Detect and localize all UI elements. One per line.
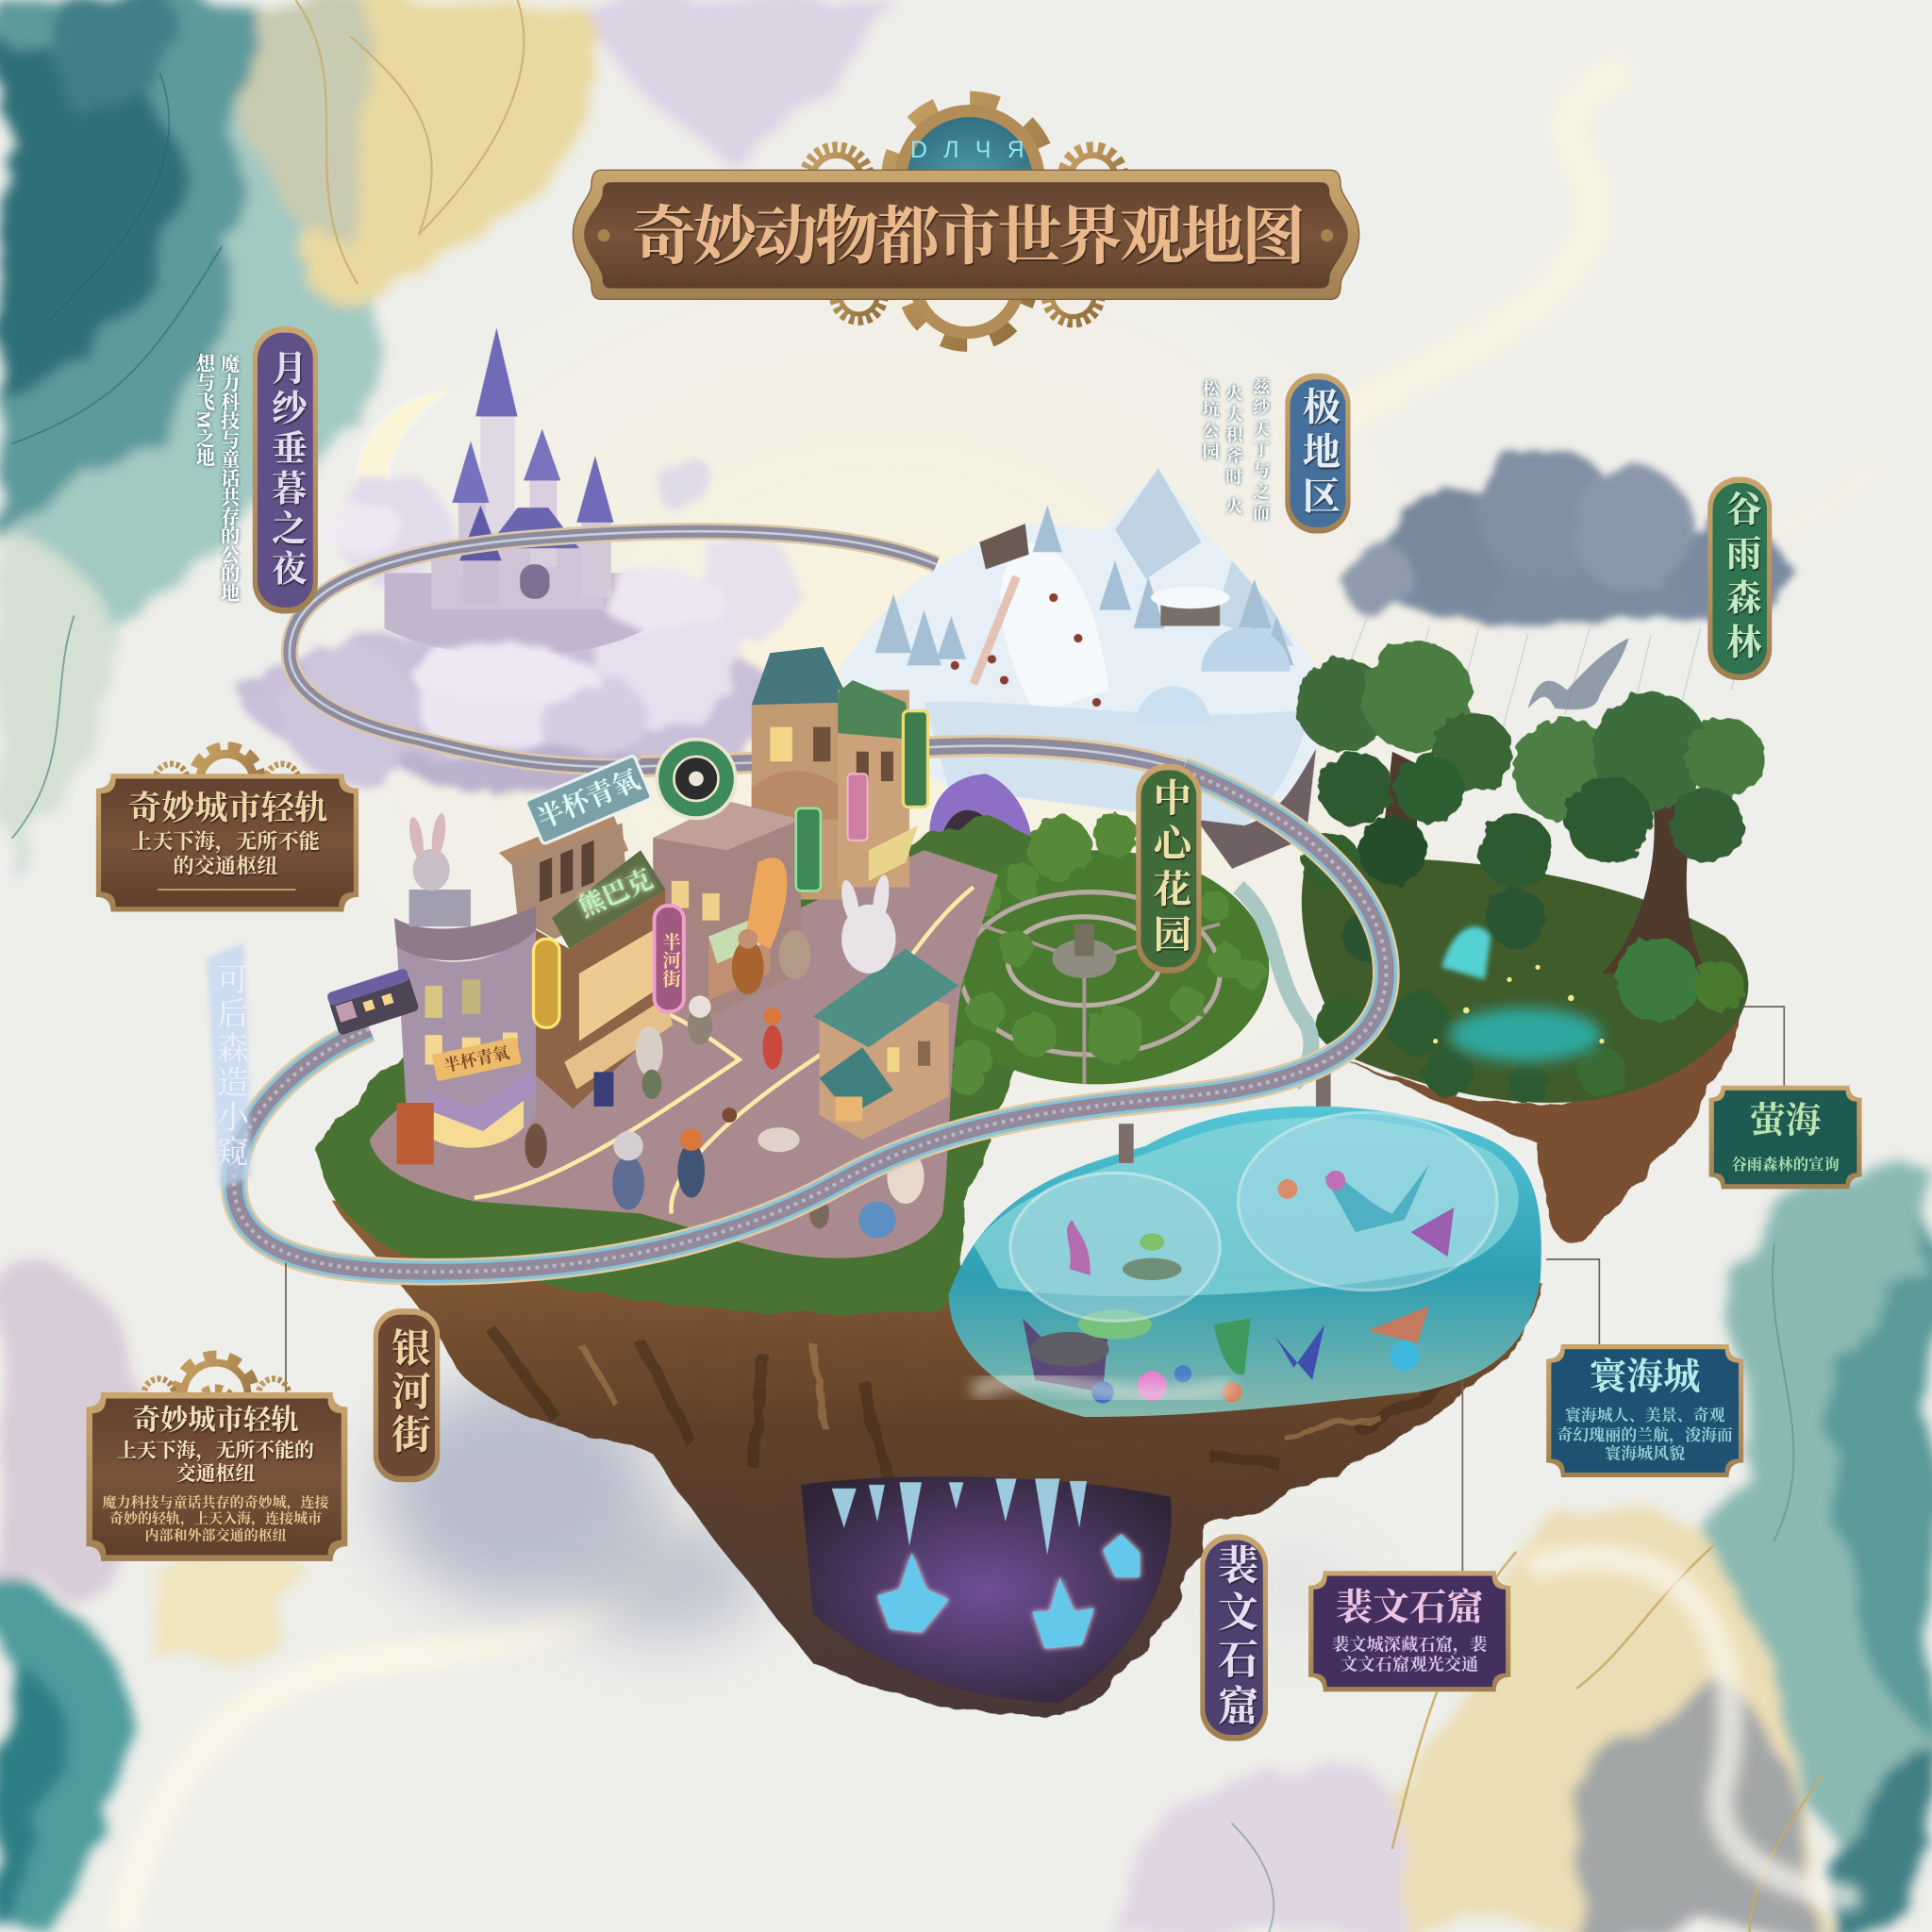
light rail train: [326, 968, 420, 1036]
plaque: rain forest: 谷雨森林: [1720, 491, 1761, 668]
vending machine: [397, 1103, 434, 1164]
lioness: [732, 929, 764, 994]
mist over tank: [974, 1380, 1232, 1395]
mist under island: [382, 1380, 1368, 1639]
support pylons: [1119, 1070, 1331, 1163]
round tower: [394, 906, 537, 1148]
panel: light rail lower: 魔力科技与童话共存的奇妙城，连接: [102, 1493, 330, 1511]
faint blue sign text: [207, 942, 251, 1189]
stalactites: [832, 1478, 1087, 1555]
foreground rail track: [234, 770, 1386, 1272]
panel: light rail lower: [86, 1357, 347, 1561]
moon night side text: [193, 353, 240, 602]
plaque: cave: 裴文石窟: [1212, 1543, 1258, 1731]
leader lines: [286, 1007, 1784, 1571]
gear crest: [144, 1357, 289, 1433]
rock cracks: [492, 1331, 1454, 1478]
polar side text: [1201, 376, 1270, 525]
cafe building: [653, 801, 801, 1017]
moon night side text: 想与飞M之地: [193, 354, 215, 467]
sign: pink small: [848, 774, 868, 841]
panel: sea city: 奇幻瑰丽的兰航，浚海而: [1557, 1425, 1733, 1445]
panel: sea city: 寰海城人、美景、奇观: [1565, 1406, 1725, 1424]
pine trees: [874, 506, 1293, 665]
plaque: moon night: 月纱垂暮之夜: [265, 349, 307, 590]
tall shop: [499, 808, 673, 1109]
rain: [1349, 616, 1750, 740]
plaque: polar: [1285, 374, 1351, 534]
back tower: [752, 647, 918, 899]
dragon silhouette: [1528, 639, 1629, 709]
polar side text: 火大积斧时 火: [1224, 384, 1243, 518]
panel: sea city: 寰海城风貌: [1605, 1444, 1685, 1463]
koala: [778, 930, 810, 979]
plaque: galaxy street: [374, 1308, 440, 1482]
crystals: [877, 1534, 1140, 1649]
central garden: [924, 813, 1311, 1095]
rabbit customer: [636, 1026, 663, 1099]
skiers: [951, 593, 1101, 707]
glowing pool and waterfall: [1449, 1008, 1602, 1062]
snow mountain polar zone: [838, 468, 1329, 869]
stream: [1239, 887, 1311, 1084]
sign: shopfront: [432, 1037, 522, 1081]
castle base wall: [385, 573, 647, 657]
rabbit in suit: [688, 995, 712, 1045]
panel: cave info: 裴文石窟: [1336, 1588, 1484, 1628]
ski slope and lodge: [979, 524, 1029, 569]
coffee disc sign: [657, 740, 736, 818]
sign: bear cafe: 熊巴克: [575, 865, 657, 923]
fireflies: [1433, 965, 1605, 1043]
forest island rock base: [1343, 1010, 1743, 1243]
plaque: galaxy street: 银河街: [385, 1327, 431, 1457]
street characters: [525, 874, 924, 1239]
cloud bank: [239, 454, 797, 782]
rabbit statue: [407, 812, 471, 926]
rosettes: [597, 229, 610, 242]
panel: light rail upper: 的交通枢纽: [174, 855, 277, 878]
floating moon castle on clouds: [239, 327, 797, 792]
right dome: [1239, 1112, 1497, 1291]
main island rock underside: [333, 1201, 1541, 1716]
rock under snow: [1183, 727, 1319, 869]
title text: 奇妙动物都市世界观地图: [632, 201, 1303, 273]
faint blue sign text: 可后森造小窥: [211, 962, 247, 1169]
forest ground: [1302, 858, 1748, 1103]
tank body: [949, 1107, 1541, 1417]
side gears top: [805, 148, 1123, 323]
city base grass: [318, 813, 1084, 1314]
sign: shopfront: 半杯青氧: [442, 1043, 511, 1075]
cloud foreground: [318, 500, 727, 792]
panel: light rail upper: [96, 748, 358, 912]
purple crystal tunnel: [929, 774, 1033, 885]
panel: sea city: 寰海城: [1590, 1357, 1700, 1398]
igloos and cabins: [1136, 587, 1291, 724]
sign: tea: [796, 808, 821, 891]
plaque: central garden: 中心花园: [1147, 777, 1191, 959]
aquarium city: [949, 1070, 1541, 1417]
tree trunks: [1380, 752, 1707, 974]
left dome: [1010, 1173, 1220, 1321]
lower gear: [906, 219, 1029, 342]
panel: firefly sea: 谷雨森林的宣询: [1731, 1156, 1840, 1174]
polar side text: 松坑公园: [1201, 379, 1220, 463]
water surface: [974, 1118, 1519, 1296]
plaza animals: [809, 1150, 924, 1239]
city buildings: [394, 647, 958, 1164]
fox foreground: [677, 1128, 705, 1198]
panel: light rail upper: 奇妙城市轻轨: [128, 790, 327, 826]
plaque: moon night: [253, 326, 318, 613]
panel: light rail lower: 奇妙城市轻轨: [132, 1404, 299, 1436]
title plaque: [573, 170, 1359, 299]
plaque: cave: [1200, 1534, 1268, 1741]
forest zone: [1296, 641, 1764, 1104]
crescent moon: [358, 391, 448, 555]
crowd group: [525, 1072, 800, 1168]
rabbit foreground: [612, 1131, 644, 1210]
big white rabbit: [839, 874, 896, 974]
moon night side text: 魔力科技与童话共存的公的地: [218, 353, 240, 602]
city street: [370, 850, 998, 1258]
panel: light rail lower: 上天下海，无所不能的: [117, 1439, 314, 1462]
sign: pink neon: [655, 906, 684, 1011]
panel: sea city: [1546, 1344, 1743, 1477]
small gear crest: [156, 748, 298, 814]
crystal cave: [801, 1476, 1172, 1703]
panel: light rail lower: 奇妙的轻轨，上天入海，连接城市: [109, 1509, 322, 1527]
title gear assembly: [805, 104, 1123, 342]
plaque: central garden: [1136, 764, 1201, 974]
polar side text: 兹纱天丁与之而: [1251, 376, 1270, 525]
panel: light rail upper: 上天下海，无所不能: [131, 830, 320, 855]
snow hill: [838, 468, 1329, 825]
glowing path lines: [475, 887, 974, 1214]
sign: half cup: 半杯青氧: [533, 764, 644, 835]
storm cloud with rain: [1337, 446, 1792, 740]
panel: cave info: 文文石窟观光交通: [1341, 1655, 1478, 1674]
panel: light rail lower: 内部和外部交通的枢纽: [144, 1527, 287, 1544]
neon shop signs: [432, 711, 928, 1081]
back rail section: [290, 531, 1183, 770]
panel: firefly sea: [1709, 1086, 1862, 1189]
sign: yellow neon: [534, 939, 559, 1027]
tree canopies: [1296, 641, 1764, 1104]
plaque: rain forest: [1707, 476, 1772, 680]
panel: cave info: [1308, 1571, 1510, 1691]
panel: cave info: 裴文城深藏石窟，裴: [1332, 1635, 1487, 1656]
sign: pink neon: 半河街: [659, 932, 681, 988]
corner house: [813, 949, 958, 1140]
panel: firefly sea: 萤海: [1750, 1102, 1822, 1141]
fox in red: [762, 1008, 782, 1070]
orb gear: [893, 104, 1046, 257]
sign: half cup: [525, 755, 652, 844]
coral floor: [1023, 1306, 1429, 1404]
runes: D Л Ч Я: [910, 138, 1029, 163]
sign: tall green: [903, 711, 928, 808]
panel: light rail lower: 交通枢纽: [176, 1462, 255, 1485]
hedges: [934, 813, 1265, 1095]
plaque: polar: 极地区: [1296, 387, 1341, 520]
castle towers: [452, 327, 613, 604]
